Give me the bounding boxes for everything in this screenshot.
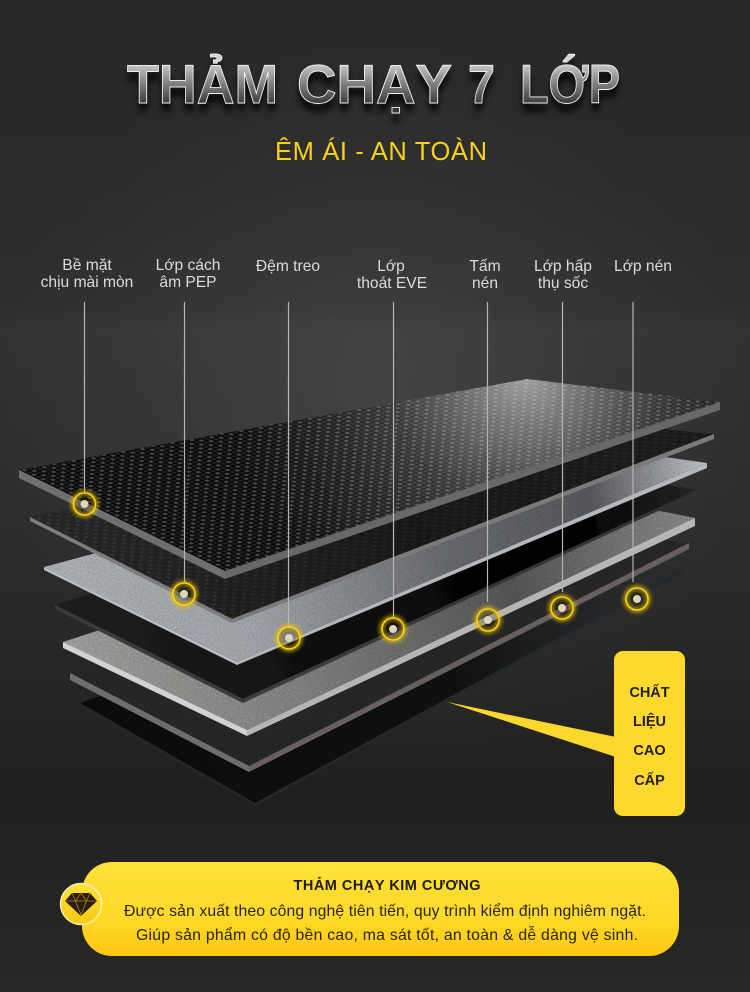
label: Lớp cách âm PEP: Lớp cách: [156, 257, 220, 274]
label: Lớp nén: Lớp nén: [614, 258, 672, 275]
banner: thảm chạy kim cương: [82, 862, 679, 956]
icon: diamond: [60, 884, 102, 924]
label: Tấm nén: [469, 258, 501, 631]
label: Lớp thoát EVE: [357, 258, 427, 640]
callout: chất liệu cao cấp: CẤP: [634, 772, 665, 789]
title: 7: [468, 53, 495, 115]
banner heading: THẢM CHẠY KIM CƯƠNG: [294, 877, 480, 894]
title: [127, 53, 620, 123]
title: CHẠY: [297, 61, 452, 123]
label: Lớp nén: [614, 258, 672, 610]
label: Tấm nén: Tấm: [469, 258, 501, 275]
title: LỚP: [520, 53, 620, 115]
label: Bề mặt chịu mài mòn: chịu mài mòn: [41, 274, 133, 291]
label: Tấm nén: nén: [472, 275, 498, 292]
subtitle: ÊM ÁI - AN TOÀN: [275, 137, 487, 166]
label: Đệm treo: [256, 258, 320, 649]
banner text: Được sản xuất theo công nghệ tiên tiến, quy trình kiểm định nghiêm ngặt.: [124, 902, 646, 920]
title: THẢM: [127, 53, 278, 115]
label: Bề mặt chịu mài mòn: [41, 257, 133, 515]
callout: chất liệu cao cấp: LIỆU: [633, 712, 666, 730]
layer 4: dark sheet: [55, 460, 697, 703]
label: Lớp thoát EVE: thoát EVE: [357, 275, 427, 292]
banner text: Giúp sản phẩm có độ bền cao, ma sát tốt, an toàn & dễ dàng vệ sinh.: [136, 925, 638, 944]
label: Đệm treo: Đệm treo: [256, 258, 320, 275]
callout: chất liệu cao cấp: CAO: [633, 743, 666, 759]
title: LỚP: [520, 61, 620, 123]
label: Lớp cách âm PEP: [156, 257, 220, 605]
title: 7: [468, 61, 495, 123]
title: THẢM: [127, 61, 278, 123]
layer 1: top carbon sheet: [19, 379, 720, 579]
label: Lớp thoát EVE: Lớp: [377, 258, 405, 275]
layer 2: carbon sheet: [30, 406, 714, 623]
label: Lớp hấp thụ sốc: [534, 258, 592, 619]
layer 3: silver sheet: [44, 437, 707, 665]
label: Lớp hấp thụ sốc: Lớp hấp: [534, 258, 592, 275]
callout: chất liệu cao cấp: [447, 651, 685, 816]
layer 7: bottom sheet: [80, 548, 683, 806]
title: CHẠY: [297, 53, 452, 115]
callout: chất liệu cao cấp: CHẤT: [629, 684, 670, 701]
layer 5: light grey sheet: [63, 490, 695, 736]
label: Bề mặt chịu mài mòn: Bề mặt: [62, 257, 112, 274]
layer 6: woven sheet with brown edge: [70, 520, 689, 772]
label: Lớp hấp thụ sốc: thụ sốc: [538, 275, 588, 292]
label: Lớp cách âm PEP: âm PEP: [159, 274, 217, 291]
